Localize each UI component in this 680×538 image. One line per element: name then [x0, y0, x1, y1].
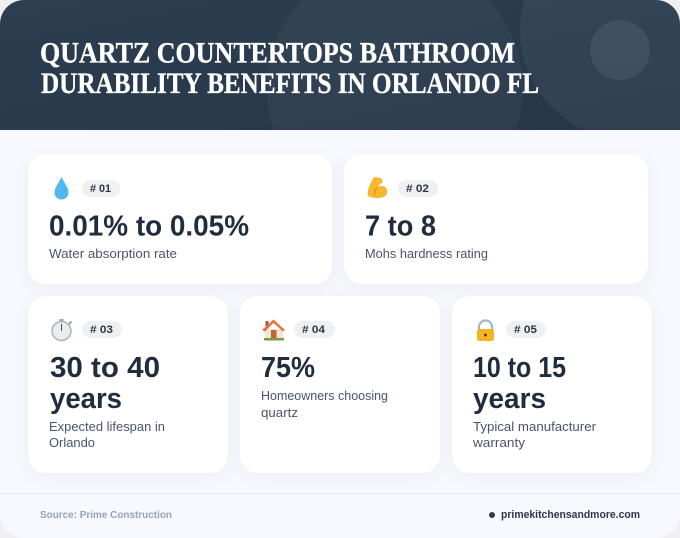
- value: years: [473, 383, 546, 415]
- panel: water absorption: [28, 154, 332, 284]
- icon: house: [262, 320, 285, 340]
- badge: 05: [506, 321, 546, 338]
- website: primekitchensandmore.com: [501, 509, 640, 521]
- header banner: [0, 0, 680, 130]
- value: years: [50, 383, 122, 415]
- panel: homeowners: [240, 296, 440, 473]
- title: [40, 36, 539, 100]
- badge: 04: [294, 321, 335, 338]
- title: DURABILITY BENEFITS IN ORLANDO FL: [41, 67, 539, 100]
- icon: water drop: [54, 177, 68, 200]
- label: Mohs hardness rating: [365, 246, 488, 261]
- badge: 01: [82, 180, 120, 197]
- title: QUARTZ COUNTERTOPS BATHROOM: [40, 36, 515, 70]
- icon: flexed bicep: [368, 177, 387, 198]
- badge: 03: # 03: [90, 324, 113, 336]
- label: Water absorption rate: [49, 246, 177, 261]
- panel: lifespan: [28, 296, 228, 473]
- value: [50, 352, 160, 415]
- icon: lock: [477, 320, 494, 341]
- badge: 04: # 04: [302, 324, 326, 336]
- badge: 01: # 01: [90, 183, 111, 195]
- badge: 05: # 05: [514, 324, 537, 336]
- value: 75%: [261, 352, 315, 384]
- label: Orlando: [49, 435, 95, 450]
- badge: 02: [398, 180, 438, 197]
- panel: warranty: [452, 296, 652, 473]
- footer: [0, 493, 680, 521]
- panel: hardness: [344, 154, 648, 284]
- value: [473, 352, 566, 415]
- value: 0.01% to 0.05%: [49, 210, 249, 242]
- icon: stopwatch: [52, 319, 72, 340]
- value: 7 to 8: [365, 210, 436, 242]
- label: Expected lifespan in: [49, 419, 165, 434]
- label: [49, 419, 165, 450]
- label: quartz: [261, 405, 298, 420]
- source: Source: Prime Construction: [40, 509, 172, 521]
- label: [261, 388, 388, 420]
- value: 10 to 15: [473, 352, 566, 384]
- label: Typical manufacturer: [473, 419, 597, 434]
- value: 30 to 40: [50, 352, 160, 384]
- label: Homeowners choosing: [261, 388, 388, 403]
- label: [472, 419, 597, 450]
- label: warranty: [472, 435, 526, 450]
- badge: 02: # 02: [406, 183, 429, 195]
- badge: 03: [82, 321, 122, 338]
